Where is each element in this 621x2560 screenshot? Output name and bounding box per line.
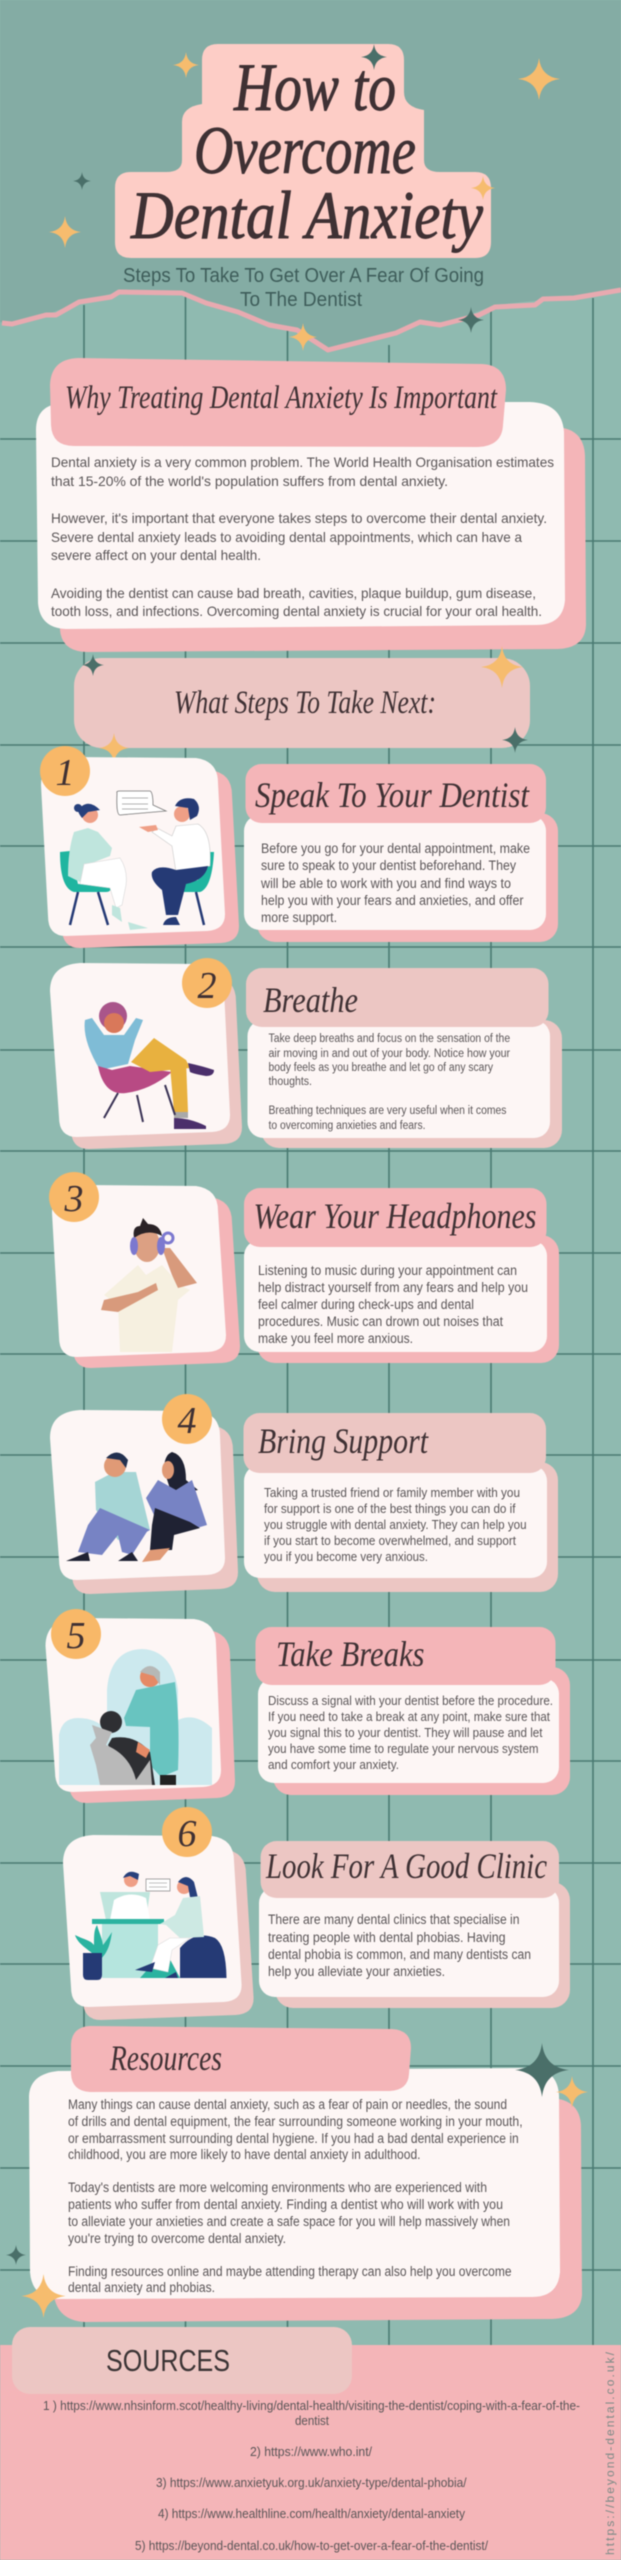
step 3: wear your headphones xyxy=(49,1172,559,1368)
body text: tooth loss, and infections. Overcoming dental anxiety is crucial for your oral health. xyxy=(51,603,542,619)
number badge 4 xyxy=(162,1394,212,1444)
step 1 text card: Speak To Your Dentist xyxy=(255,775,530,815)
heading: why treating xyxy=(50,358,506,447)
step 1 illustration card xyxy=(40,746,239,948)
step 1 text card: more support. xyxy=(261,910,337,925)
number badge 1: 1 xyxy=(56,752,74,794)
number badge 2: 2 xyxy=(198,965,216,1007)
vertical website url: https://beyond-dental.co.uk/ xyxy=(603,2351,617,2555)
number badge 3 xyxy=(49,1172,99,1222)
body text: Dental anxiety is a very common problem. The World Health Organisation estimates xyxy=(51,454,554,470)
step 5 text card xyxy=(256,1627,570,1795)
illustration: person with headphones xyxy=(101,1218,197,1352)
number badge 2 xyxy=(182,958,232,1008)
step 6 text card: There are many dental clinics that specialise in xyxy=(268,1912,520,1927)
stars around steps heading xyxy=(82,646,528,763)
step 4 text card xyxy=(244,1413,558,1592)
title background xyxy=(115,44,491,258)
number badge 6: 6 xyxy=(178,1813,196,1855)
step 6 text card: help you alleviate your anxieties. xyxy=(268,1964,445,1979)
body text: Avoiding the dentist can cause bad breath, cavities, plaque buildup, gum disease, xyxy=(51,585,536,601)
subtitle: Steps To Take To Get Over A Fear Of Going xyxy=(123,265,484,287)
panel: what steps to take next: What Steps To Take Next: xyxy=(174,685,436,721)
heading: sources: SOURCES xyxy=(106,2343,230,2378)
title text: Dental Anxiety xyxy=(130,177,484,253)
source links: dentist xyxy=(295,2414,329,2428)
step 5 text card: you signal this to your dentist. They will pause and let xyxy=(268,1725,543,1740)
step 5 text card: Discuss a signal with your dentist before the procedure. xyxy=(268,1693,553,1708)
illustration: dentist treating patient xyxy=(59,1649,212,1785)
panel: why treating dental anxiety is important xyxy=(36,358,586,652)
source links: 5) https://beyond-dental.co.uk/how-to-get-over-a-fear-of-the-dentist/ xyxy=(135,2539,488,2553)
number badge 4: 4 xyxy=(178,1400,196,1442)
wavy divider line xyxy=(2,290,621,350)
body text: severe affect on your dental health. xyxy=(51,547,261,563)
step 6 illustration card xyxy=(63,1807,254,2020)
step 5 text card: If you need to take a break at any point, make sure that xyxy=(268,1709,550,1724)
step 6 text card: treating people with dental phobias. Having xyxy=(268,1930,506,1945)
step 4 text card: you struggle with dental anxiety. They can help you xyxy=(264,1517,527,1532)
resources body text: Today's dentists are more welcoming environments who are experienced with xyxy=(68,2180,487,2195)
illustration: patient talking to dentist xyxy=(60,791,214,930)
step 1 text card: Before you go for your dental appointment, make xyxy=(261,841,530,856)
resources body text: Finding resources online and maybe attending therapy can also help you overcome xyxy=(68,2264,512,2279)
step 3 text card xyxy=(244,1188,559,1363)
source links: 3) https://www.anxietyuk.org.uk/anxiety-type/dental-phobia/ xyxy=(156,2476,467,2490)
resources body text: patients who suffer from dental anxiety. Finding a dentist who will work with you xyxy=(68,2197,503,2212)
number badge 6 xyxy=(162,1807,212,1857)
step 4 text card: if you start to become overwhelmed, and support xyxy=(264,1533,516,1548)
step 1 text card xyxy=(244,764,558,942)
illustration: clinic reception desk xyxy=(75,1872,226,1980)
step 4 text card: Bring Support xyxy=(258,1421,429,1461)
subtitle: To The Dentist xyxy=(240,289,362,311)
step 4 illustration card xyxy=(50,1394,238,1594)
source links: 4) https://www.healthline.com/health/anxiety/dental-anxiety xyxy=(158,2507,466,2521)
step 4 text card: Taking a trusted friend or family member with you xyxy=(264,1485,520,1500)
number badge 5: 5 xyxy=(66,1615,86,1657)
number badge 5 xyxy=(51,1609,101,1659)
stars around resources panel xyxy=(6,2043,588,2318)
title text: How to xyxy=(233,49,396,125)
step 2: breathe xyxy=(50,958,562,1149)
title text xyxy=(130,49,484,253)
step 3 text card: Wear Your Headphones xyxy=(254,1196,536,1236)
step 1 text card: help you with your fears and anxieties, and offer xyxy=(261,893,524,908)
step 5 text card: you have some time to regulate your nervous system xyxy=(268,1741,538,1756)
source links: 1 ) https://www.nhsinform.scot/healthy-living/dental-health/visiting-the-dentist/coping-with-a-fear-of-the- xyxy=(43,2399,580,2413)
step 6 text card: Look For A Good Clinic xyxy=(265,1846,547,1886)
step 3 text card: help distract yourself from any fears and help you xyxy=(258,1280,528,1295)
panel: sources xyxy=(0,2327,621,2560)
step 2 text card: Breathing techniques are very useful when it comes xyxy=(268,1105,507,1117)
resources body text: or embarrassment surrounding dental hygiene. If you had a bad dental experience in xyxy=(68,2131,519,2146)
step 1 text card: will be able to work with you and find ways to xyxy=(260,876,511,891)
heading: sources xyxy=(12,2327,352,2394)
body text: However, it's important that everyone takes steps to overcome their dental anxiety. xyxy=(51,510,547,526)
step 1: speak to your dentist xyxy=(40,746,558,948)
resources body text: you're trying to overcome dental anxiety. xyxy=(68,2231,286,2246)
step 3 text card: Listening to music during your appointment can xyxy=(258,1263,517,1278)
step 2 text card: Take deep breaths and focus on the sensation of the xyxy=(268,1033,510,1045)
heading: resources: Resources xyxy=(109,2038,222,2078)
subtitle xyxy=(123,265,484,311)
step 5 text card: Take Breaks xyxy=(276,1634,424,1674)
title block xyxy=(115,44,491,258)
step 6 text card xyxy=(259,1841,570,2008)
source links xyxy=(43,2399,580,2553)
step 4 text card: for support is one of the best things you can do if xyxy=(264,1501,516,1516)
step 3 illustration card xyxy=(49,1172,240,1368)
panel: what steps to take next xyxy=(74,658,530,748)
step 4: bring support xyxy=(50,1394,558,1594)
resources body text: Many things can cause dental anxiety, such as a fear of pain or needles, the sound xyxy=(68,2097,507,2112)
step 3 text card: make you feel more anxious. xyxy=(258,1331,413,1346)
resources body text: childhood, you are more likely to have dental anxiety in adulthood. xyxy=(68,2147,420,2162)
panel: resources xyxy=(29,2026,582,2322)
title text: Overcome xyxy=(194,112,416,188)
step 2 text card: to overcoming anxieties and fears. xyxy=(268,1120,426,1132)
step 2 text card: thoughts. xyxy=(268,1076,312,1088)
resources body text: to alleviate your anxieties and create a safe space for you will help massively when xyxy=(68,2214,510,2229)
illustration: relaxed person in chair xyxy=(85,1002,214,1129)
body text: that 15-20% of the world's population suffers from dental anxiety. xyxy=(51,473,448,489)
step 1 text card: sure to speak to your dentist beforehand. They xyxy=(261,858,516,873)
resources body text xyxy=(68,2097,523,2295)
step 6: look for a good clinic xyxy=(63,1807,570,2020)
illustration: friend comforting a person xyxy=(66,1452,207,1562)
step 5: take breaks xyxy=(46,1609,570,1803)
source links: 2) https://www.who.int/ xyxy=(250,2445,373,2459)
step 3 text card: feel calmer during check-ups and dental xyxy=(258,1297,474,1312)
step 2 text card: body feels as you breathe and let go of any scary xyxy=(268,1062,493,1074)
step 2 text card xyxy=(246,968,562,1148)
step 4 text card: you if you become very anxious. xyxy=(264,1549,428,1564)
step 2 text card: air moving in and out of your body. Notice how your xyxy=(268,1048,510,1060)
number badge 3: 3 xyxy=(64,1178,84,1220)
resources body text: dental anxiety and phobias. xyxy=(68,2280,215,2295)
heading: resources xyxy=(71,2026,411,2092)
body text xyxy=(51,454,554,619)
heading: why treating: Why Treating Dental Anxiety Is Important xyxy=(65,380,498,416)
step 6 text card: dental phobia is common, and many dentists can xyxy=(268,1947,531,1962)
body text: Severe dental anxiety leads to avoiding dental appointments, which can have a xyxy=(51,529,522,545)
step 2 illustration card xyxy=(50,958,242,1149)
step 3 text card: procedures. Music can drown out noises that xyxy=(258,1314,503,1329)
header stars xyxy=(49,44,560,351)
resources body text: of drills and dental equipment, the fear surrounding someone working in your mouth, xyxy=(68,2114,523,2129)
step 5 illustration card xyxy=(46,1609,235,1803)
step 5 text card: and comfort your anxiety. xyxy=(268,1757,399,1772)
number badge 1 xyxy=(40,746,90,796)
step 2 text card: Breathe xyxy=(263,980,358,1020)
